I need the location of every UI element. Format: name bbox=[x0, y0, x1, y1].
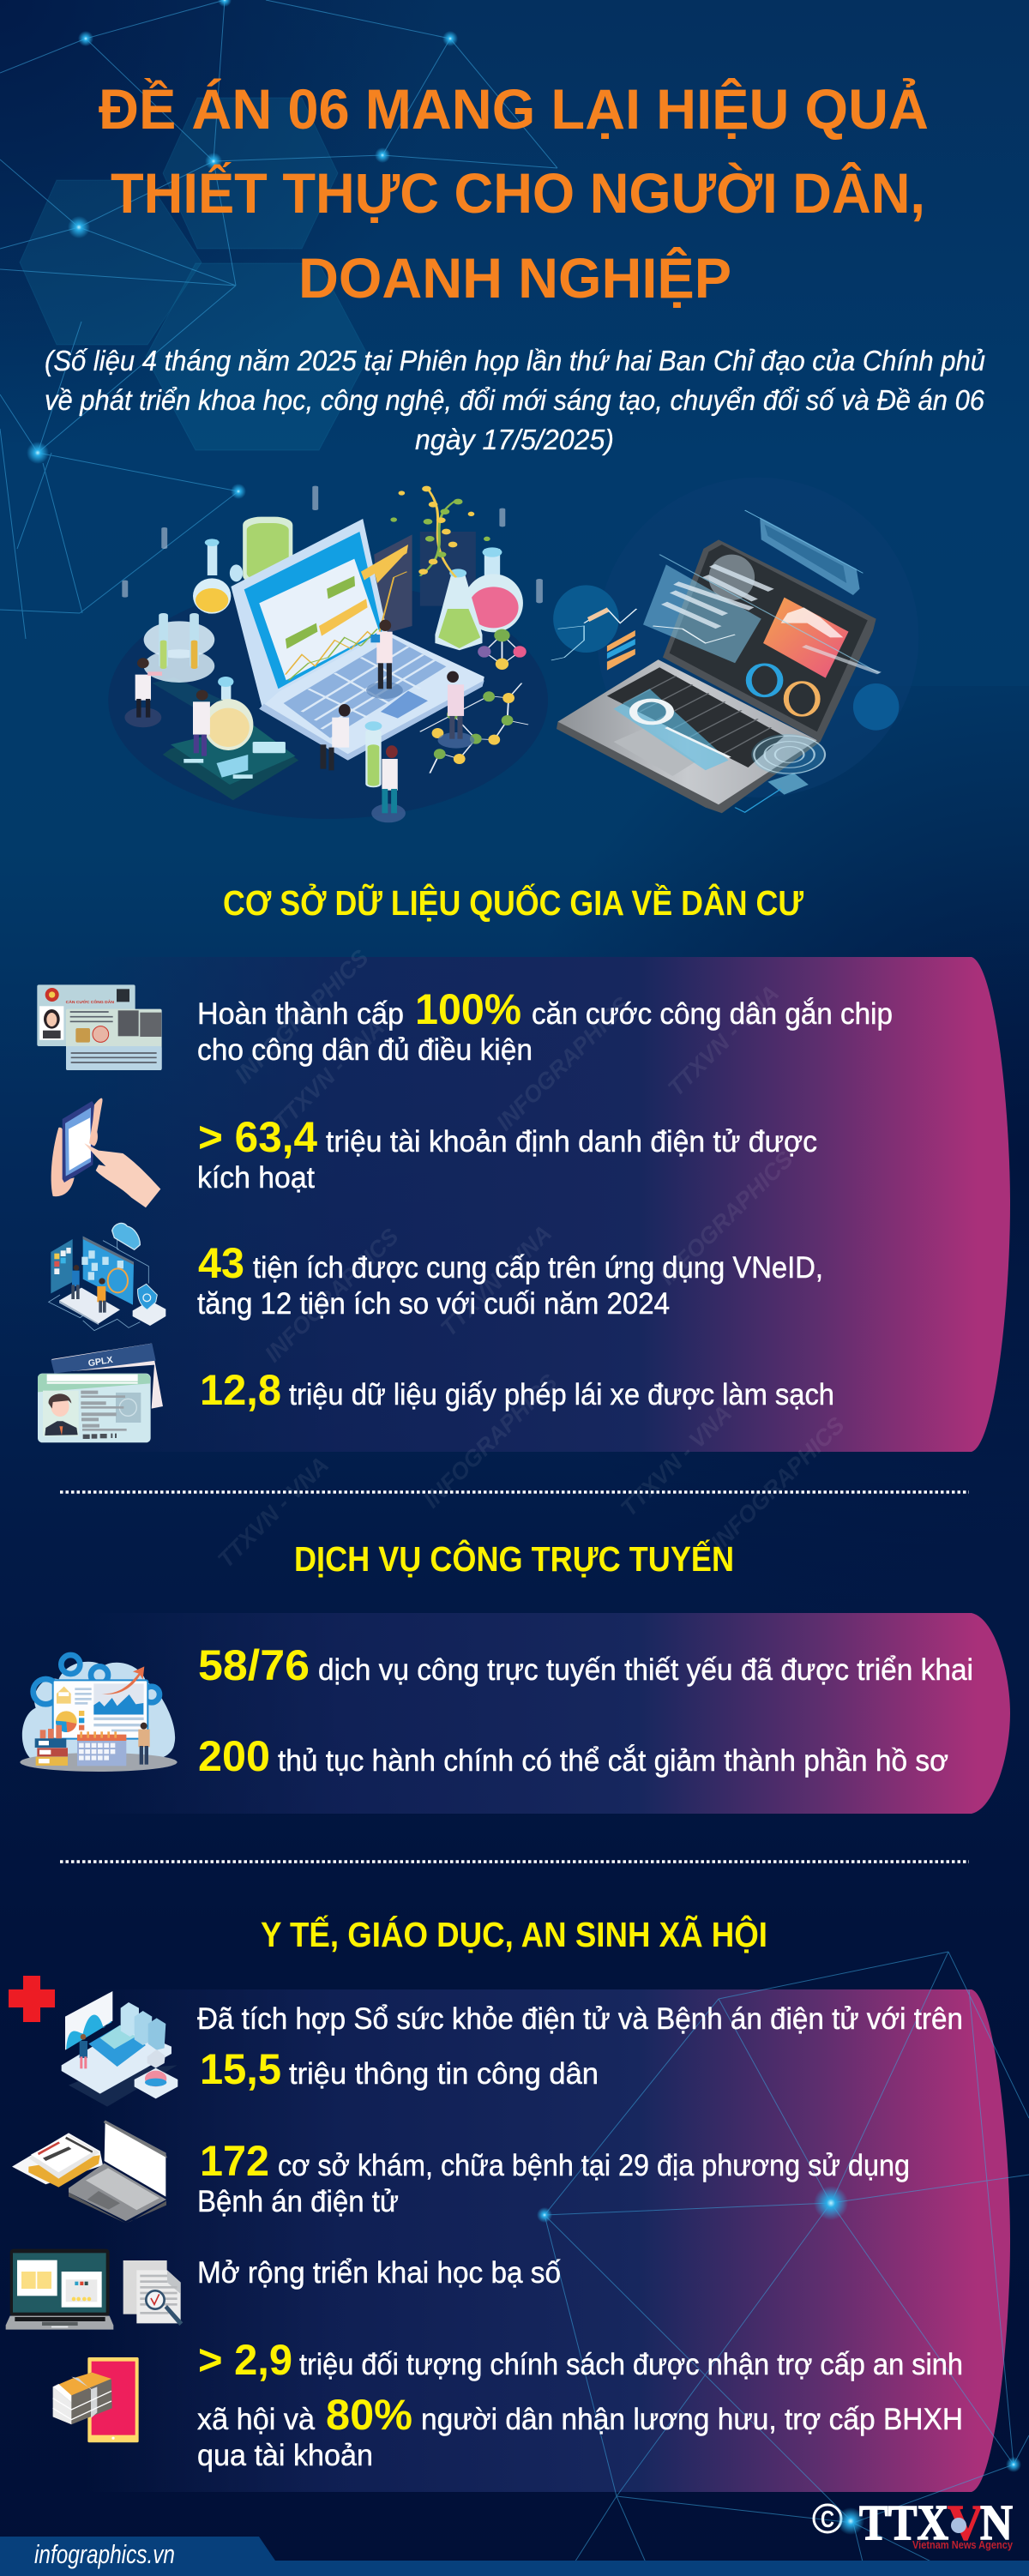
subtitle: về phát triển khoa học, công nghệ, đổi mới sáng tạo, chuyển đổi số và Đề án 06 bbox=[45, 384, 985, 416]
text block: population database figures: Hoàn thành cấp bbox=[197, 997, 404, 1031]
text block: online services figures: thủ tục hành chính có thể cắt giảm thành phần hồ sơ bbox=[278, 1744, 948, 1778]
network lines bottom-right bbox=[537, 1952, 1029, 2576]
text block: population database figures: tiện ích được cung cấp trên ứng dụng VNeID, bbox=[253, 1251, 823, 1285]
text block: online services figures: 58/76 bbox=[198, 1641, 310, 1689]
text block: online services figures bbox=[198, 1641, 973, 1780]
text block: online services figures: dịch vụ công trực tuyến thiết yếu đã được triển khai bbox=[318, 1653, 973, 1687]
text block: population database figures: triệu dữ liệu giấy phép lái xe được làm sạch bbox=[289, 1378, 834, 1411]
icon: digital health data bbox=[62, 1991, 178, 2107]
text block: population database figures: tăng 12 tiện ích so với cuối năm 2024 bbox=[197, 1287, 670, 1321]
scientists bbox=[124, 620, 474, 822]
logo: TTXVN: Vietnam News Agency bbox=[912, 2538, 1014, 2551]
icon: social security money on phone bbox=[53, 2357, 139, 2442]
text block: population database figures: căn cước công dân gắn chip bbox=[532, 997, 893, 1031]
text block: health, education, social security figures: 80% bbox=[326, 2391, 412, 2439]
watermarks: TTXVN - VNA bbox=[436, 1220, 557, 1341]
text block: population database figures: > 63,4 bbox=[198, 1113, 317, 1161]
text block: health, education, social security figures: Đã tích hợp Sổ sức khỏe điện tử và Bệnh án điện tử với trên bbox=[197, 2002, 963, 2036]
text block: population database figures: kích hoạt bbox=[197, 1161, 315, 1195]
watermarks: INFOGRAPHICS bbox=[260, 1224, 404, 1367]
text block: population database figures: 100% bbox=[415, 985, 521, 1033]
logo: TTXVN: C bbox=[821, 2506, 834, 2532]
text block: online services figures: 200 bbox=[198, 1732, 270, 1780]
text block: health, education, social security figures: Mở rộng triển khai học bạ số bbox=[197, 2256, 561, 2290]
subtitle bbox=[45, 345, 985, 455]
text block: population database figures: triệu tài khoản định danh điện tử được bbox=[326, 1125, 817, 1159]
icon: phone in hand bbox=[51, 1098, 160, 1207]
logo: TTXVN: V bbox=[948, 2495, 984, 2550]
logo: TTXVN: N bbox=[980, 2495, 1013, 2550]
watermarks: INFOGRAPHICS bbox=[654, 1147, 798, 1290]
text block: health, education, social security figures: 15,5 bbox=[200, 2045, 281, 2093]
heading: population database: CƠ SỞ DỮ LIỆU QUỐC GIA VỀ DÂN CƯ bbox=[223, 883, 804, 923]
watermarks bbox=[213, 945, 850, 1573]
illustration: science laptop bbox=[108, 486, 548, 822]
icon: citizen ID cards bbox=[37, 984, 162, 1070]
text block: population database figures: 12,8 bbox=[200, 1366, 281, 1414]
watermarks: TTXVN - VNA bbox=[663, 980, 784, 1101]
watermarks: TTXVN - VNA bbox=[616, 1400, 737, 1521]
text block: health, education, social security figures: 172 bbox=[200, 2137, 269, 2185]
text block: health, education, social security figures: xã hội và bbox=[197, 2403, 316, 2436]
watermarks: TTXVN - VNA bbox=[268, 1014, 389, 1135]
icon: VNeID services bbox=[49, 1223, 165, 1331]
watermarks: INFOGRAPHICS bbox=[418, 1369, 563, 1513]
logo: TTXVN: TTX bbox=[859, 2495, 948, 2550]
icon: driving licence cards bbox=[38, 1344, 163, 1442]
title: DOANH NGHIỆP bbox=[298, 246, 731, 310]
text block: population database figures: 43 bbox=[198, 1239, 244, 1287]
text block: health, education, social security figures bbox=[197, 2002, 963, 2472]
title: THIẾT THỰC CHO NGƯỜI DÂN, bbox=[111, 161, 925, 225]
panel: population database background bbox=[86, 957, 1010, 1452]
text block: health, education, social security figures: qua tài khoản bbox=[197, 2439, 373, 2472]
background hexagons bbox=[20, 98, 369, 450]
icon: electronic medical record laptop bbox=[12, 2121, 167, 2224]
subtitle: ngày 17/5/2025) bbox=[415, 424, 614, 455]
text block: health, education, social security figures: cơ sở khám, chữa bệnh tại 29 địa phương sử dụng bbox=[278, 2149, 910, 2182]
watermarks: INFOGRAPHICS bbox=[491, 992, 635, 1135]
network lines top-left bbox=[0, 0, 557, 639]
title bbox=[99, 77, 929, 310]
watermarks: TTXVN - VNA bbox=[213, 1452, 334, 1573]
text block: health, education, social security figures: người dân nhận lương hưu, trợ cấp BHXH bbox=[421, 2403, 963, 2436]
text block: population database figures bbox=[197, 985, 893, 1414]
watermarks: INFOGRAPHICS bbox=[230, 945, 374, 1088]
icon: citizen ID cards: CĂN CƯỚC CÔNG DÂN bbox=[66, 998, 114, 1005]
text block: health, education, social security figures: Bệnh án điện tử bbox=[197, 2185, 399, 2218]
illustration: data laptop bbox=[551, 478, 918, 813]
panel: health, education, social security background bbox=[86, 1989, 1010, 2492]
title: ĐỀ ÁN 06 MANG LẠI HIỆU QUẢ bbox=[99, 77, 929, 141]
text block: health, education, social security figures: triệu thông tin công dân bbox=[289, 2057, 599, 2091]
text block: health, education, social security figures: > 2,9 bbox=[198, 2336, 292, 2384]
logo: TTXVN bbox=[814, 2495, 1014, 2551]
watermarks: INFOGRAPHICS bbox=[706, 1412, 850, 1556]
icon: digital school record bbox=[6, 2249, 183, 2330]
text block: population database figures: cho công dân đủ điều kiện bbox=[197, 1033, 533, 1067]
footer source: infographics.vn bbox=[34, 2539, 175, 2569]
text block: health, education, social security figures: triệu đối tượng chính sách được nhận trợ cấp an sinh bbox=[299, 2348, 963, 2381]
icon: driving licence cards: GPLX bbox=[87, 1355, 114, 1369]
heading: health, education, social security: Y TẾ, GIÁO DỤC, AN SINH XÃ HỘI bbox=[261, 1915, 767, 1954]
icon: online services dashboard bbox=[20, 1655, 178, 1772]
heading: online public services: DỊCH VỤ CÔNG TRỰC TUYẾN bbox=[294, 1539, 734, 1579]
subtitle: (Số liệu 4 tháng năm 2025 tại Phiên họp lần thứ hai Ban Chỉ đạo của Chính phủ bbox=[45, 345, 985, 376]
footer band bbox=[0, 2537, 1029, 2576]
icon: red cross bbox=[9, 1976, 55, 2022]
panel: online public services background bbox=[86, 1613, 1010, 1814]
